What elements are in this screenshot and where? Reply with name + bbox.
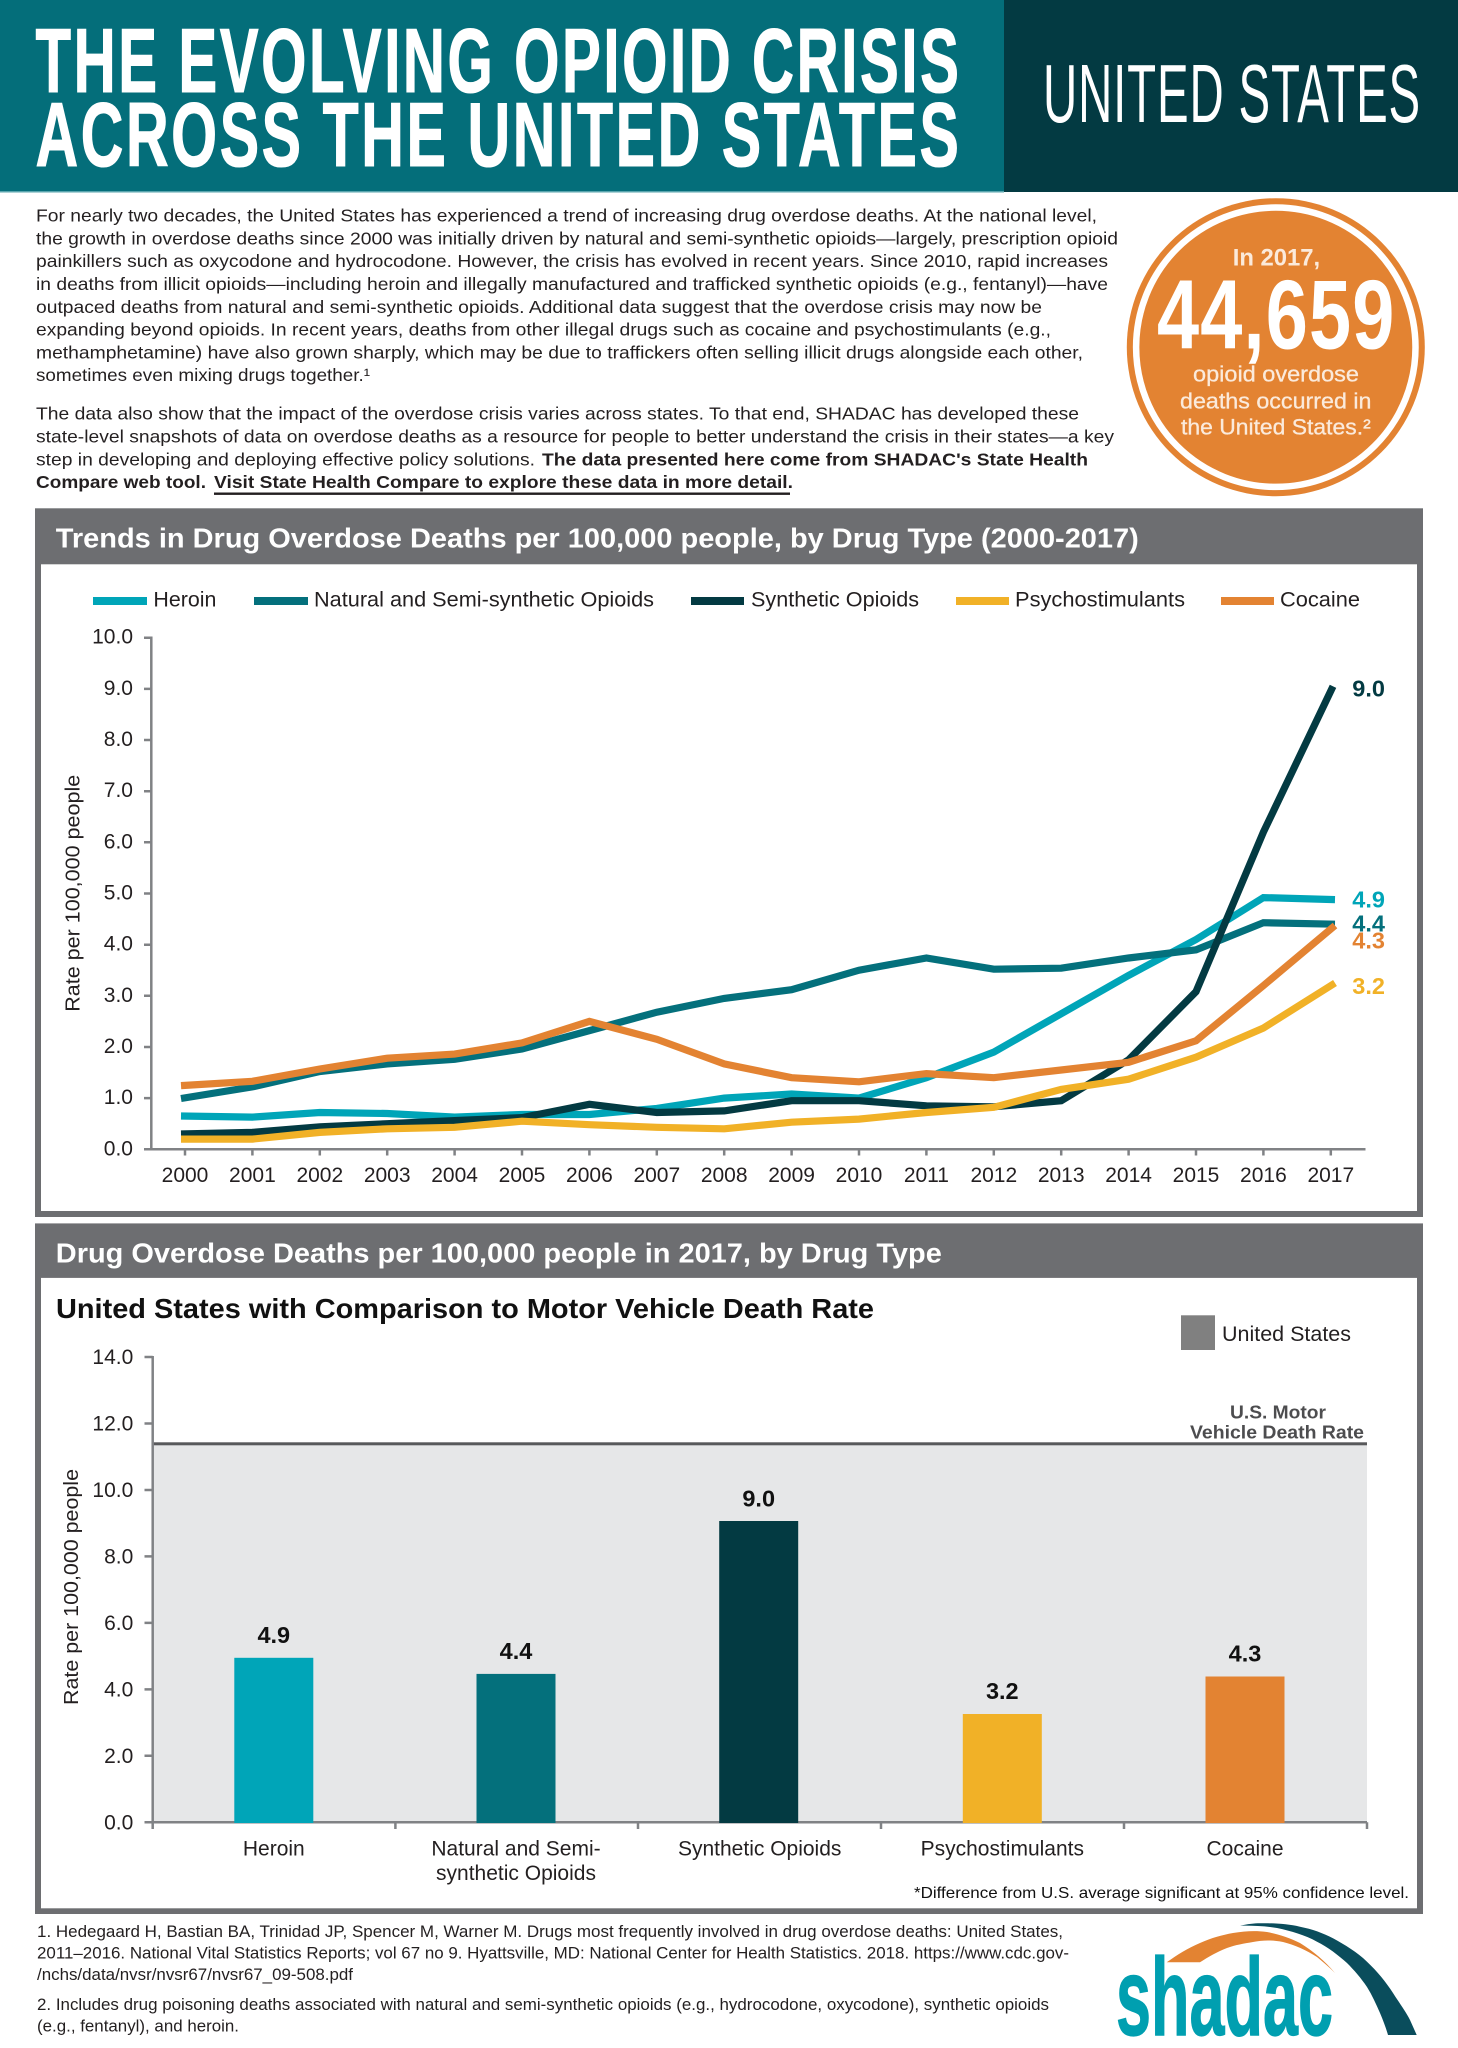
- line: cocaine: [181, 926, 1335, 1086]
- x axis: 2000: [162, 1164, 208, 1187]
- x axis: 2002: [296, 1164, 343, 1187]
- x axis: 2016: [1240, 1164, 1287, 1187]
- x axis: 2001: [229, 1164, 276, 1187]
- bar: heroin: 4.9: [257, 1622, 290, 1648]
- y axis: 9.0: [104, 677, 133, 700]
- bar: synthetic opioids: Synthetic Opioids: [678, 1838, 841, 1860]
- callout: 44,659 deaths: 44,659: [1157, 259, 1396, 369]
- x axis: 2008: [701, 1164, 748, 1187]
- line: heroin: [181, 898, 1335, 1117]
- bar: cocaine: [1206, 1641, 1284, 1860]
- y axis: [62, 626, 151, 1160]
- panel: trends line chart: [35, 508, 1423, 1217]
- bar: natural and semi-synthetic opioids: synthetic Opioids: [436, 1862, 596, 1885]
- line: synthetic opioids: [181, 686, 1333, 1134]
- bar: psychostimulants: [921, 1678, 1084, 1860]
- bar: cocaine: 4.3: [1229, 1641, 1261, 1667]
- intro text block: [36, 206, 1118, 495]
- y axis: Rate per 100,000 people: [62, 775, 84, 1012]
- line: psychostimulants: [181, 983, 1335, 1139]
- callout: 44,659 deaths: the United States.²: [1181, 414, 1371, 439]
- footnotes: /nchs/data/nvsr/nvsr67/nvsr67_09-508.pdf: [37, 1966, 353, 1984]
- bar chart axes: 6.0: [104, 1612, 133, 1635]
- y axis: 2.0: [104, 1035, 133, 1058]
- bar chart axes: Rate per 100,000 people: [61, 1469, 83, 1705]
- motor vehicle death rate band: U.S. Motor: [1230, 1402, 1326, 1422]
- bar chart axes: 12.0: [92, 1412, 133, 1436]
- x axis: 2007: [633, 1164, 680, 1187]
- bar chart legend: [1181, 1315, 1351, 1350]
- x axis: 2012: [970, 1164, 1017, 1187]
- y axis: 5.0: [104, 882, 133, 904]
- title: THE EVOLVING OPIOID CRISIS: [36, 11, 962, 112]
- callout: 44,659 deaths: [1127, 198, 1425, 496]
- chart legend: Psychostimulants: [1015, 588, 1185, 612]
- bar chart axes: 0.0: [104, 1811, 133, 1834]
- bar chart legend: United States: [1222, 1323, 1351, 1346]
- bar: cocaine: Cocaine: [1206, 1838, 1284, 1860]
- intro text block: in deaths from illicit opioids—including heroin and illegally manufactured and trafficked synthetic opioids (e.g., fentanyl)—have: [36, 274, 1108, 294]
- line: natural and semi-synthetic opioids: [181, 923, 1335, 1098]
- bar: heroin: Heroin: [243, 1838, 305, 1860]
- x axis: [150, 1149, 1366, 1187]
- end-of-line value labels: [1352, 676, 1385, 999]
- y axis: 1.0: [104, 1086, 133, 1109]
- intro text block: The data also show that the impact of the overdose crisis varies across states. To that end, SHADAC has developed these: [36, 404, 1079, 424]
- intro text block: painkillers such as oxycodone and hydrocodone. However, the crisis has evolved in recent years. Since 2010, rapid increases: [36, 251, 1108, 271]
- callout: 44,659 deaths: In 2017,: [1233, 245, 1320, 272]
- intro text block: Compare web tool.: [36, 472, 206, 492]
- intro text block: The data presented here come from SHADAC's State Health: [542, 449, 1088, 469]
- bar: natural and semi-synthetic opioids: 4.4: [500, 1638, 532, 1664]
- chart legend: Synthetic Opioids: [751, 588, 919, 612]
- footnotes: (e.g., fentanyl), and heroin.: [37, 2017, 239, 2035]
- panel: 2017 bar chart: [35, 1223, 1423, 1914]
- footnotes: 2. Includes drug poisoning deaths associated with natural and semi-synthetic opioids (e.g., hydrocodone, oxycodone), synthetic opioids: [37, 1996, 1049, 2014]
- bar: psychostimulants: 3.2: [986, 1678, 1019, 1704]
- intro text block: expanding beyond opioids. In recent years, deaths from other illegal drugs such as cocaine and psychostimulants (e.g.,: [36, 320, 1051, 340]
- end-of-line value labels: 4.3: [1352, 927, 1385, 953]
- x axis: 2004: [431, 1164, 478, 1187]
- chart legend: Natural and Semi-synthetic Opioids: [314, 588, 654, 612]
- x axis: 2015: [1173, 1164, 1219, 1187]
- x axis: 2011: [904, 1164, 949, 1187]
- panel heading: 2017 deaths: Drug Overdose Deaths per 100,000 people in 2017, by Drug Type: [56, 1237, 942, 1268]
- bar: natural and semi-synthetic opioids: [431, 1638, 601, 1885]
- bar chart axes: [61, 1346, 1367, 1834]
- x axis: 2009: [768, 1164, 815, 1187]
- chart legend: Cocaine: [1280, 588, 1360, 612]
- header banner: [0, 0, 1458, 192]
- end-of-line value labels: 3.2: [1352, 973, 1385, 999]
- chart legend: Heroin: [153, 588, 216, 612]
- intro text block: Visit State Health Compare to explore these data in more detail.: [214, 472, 793, 492]
- y axis: 3.0: [104, 984, 133, 1007]
- end-of-line value labels: 9.0: [1352, 676, 1385, 702]
- intro text block: step in developing and deploying effective policy solutions.: [36, 449, 535, 469]
- title: ACROSS THE UNITED STATES: [36, 85, 962, 186]
- x axis: 2005: [499, 1164, 545, 1187]
- chart subheading: United States with Comparison to Motor Vehicle Death Rate: [56, 1293, 874, 1324]
- significance note: *Difference from U.S. average significant at 95% confidence level.: [914, 1885, 1409, 1902]
- panel heading: trends: Trends in Drug Overdose Deaths per 100,000 people, by Drug Type (2000-2017): [56, 522, 1139, 553]
- callout: 44,659 deaths: opioid overdose: [1193, 362, 1359, 387]
- x axis: 2017: [1307, 1164, 1354, 1187]
- bar chart axes: 10.0: [92, 1479, 133, 1502]
- y axis: 4.0: [104, 933, 133, 956]
- motor vehicle death rate band: Vehicle Death Rate: [1190, 1423, 1364, 1443]
- bar: psychostimulants: Psychostimulants: [921, 1838, 1084, 1860]
- intro text block: state-level snapshots of data on overdose deaths as a resource for people to better understand the crisis in their states—a key: [36, 426, 1114, 446]
- bar: synthetic opioids: [678, 1486, 841, 1860]
- title: [36, 11, 962, 186]
- end-of-line value labels: 4.4: [1352, 911, 1385, 937]
- intro text block: outpaced deaths from natural and semi-synthetic opioids. Additional data suggest that the overdose crisis may now be: [36, 297, 1042, 317]
- y axis: 10.0: [92, 626, 133, 649]
- callout: 44,659 deaths: deaths occurred in: [1180, 388, 1372, 413]
- bar chart axes: 2.0: [104, 1745, 133, 1768]
- x axis: 2014: [1105, 1164, 1152, 1187]
- y axis: 6.0: [104, 830, 133, 853]
- x axis: 2013: [1038, 1164, 1085, 1187]
- end-of-line value labels: 4.9: [1352, 887, 1385, 913]
- bar: heroin: [234, 1622, 313, 1860]
- x axis: 2006: [566, 1164, 613, 1187]
- footnotes: 2011–2016. National Vital Statistics Reports; vol 67 no 9. Hyattsville, MD: National Center for Health Statistics. 2018. https://www.cdc.gov-: [37, 1944, 1069, 1962]
- bar chart axes: 4.0: [104, 1678, 133, 1701]
- intro text block: the growth in overdose deaths since 2000 was initially driven by natural and semi-synthetic opioids—largely, prescription opioid: [36, 228, 1118, 248]
- x axis: 2003: [364, 1164, 411, 1187]
- y axis: 8.0: [104, 728, 133, 751]
- y axis: 0.0: [104, 1137, 133, 1160]
- bar chart axes: 8.0: [104, 1545, 133, 1568]
- footnotes: 1. Hedegaard H, Bastian BA, Trinidad JP, Spencer M, Warner M. Drugs most frequently involved in drug overdose deaths: United States,: [37, 1923, 1063, 1941]
- intro text block: sometimes even mixing drugs together.¹: [36, 365, 370, 385]
- bar chart axes: 14.0: [92, 1346, 133, 1369]
- chart legend: [93, 588, 1360, 612]
- intro text block: methamphetamine) have also grown sharply, which may be due to traffickers often selling illicit drugs alongside each other,: [36, 342, 1083, 362]
- footnotes: [37, 1923, 1069, 2035]
- y axis: 7.0: [104, 779, 133, 802]
- motor vehicle death rate band: [152, 1402, 1367, 1822]
- x axis: 2010: [836, 1164, 882, 1187]
- bar: synthetic opioids: 9.0: [742, 1486, 775, 1512]
- bar: natural and semi-synthetic opioids: Natural and Semi-: [431, 1838, 601, 1860]
- intro text block: For nearly two decades, the United States has experienced a trend of increasing drug overdose deaths. At the national level,: [36, 206, 1097, 226]
